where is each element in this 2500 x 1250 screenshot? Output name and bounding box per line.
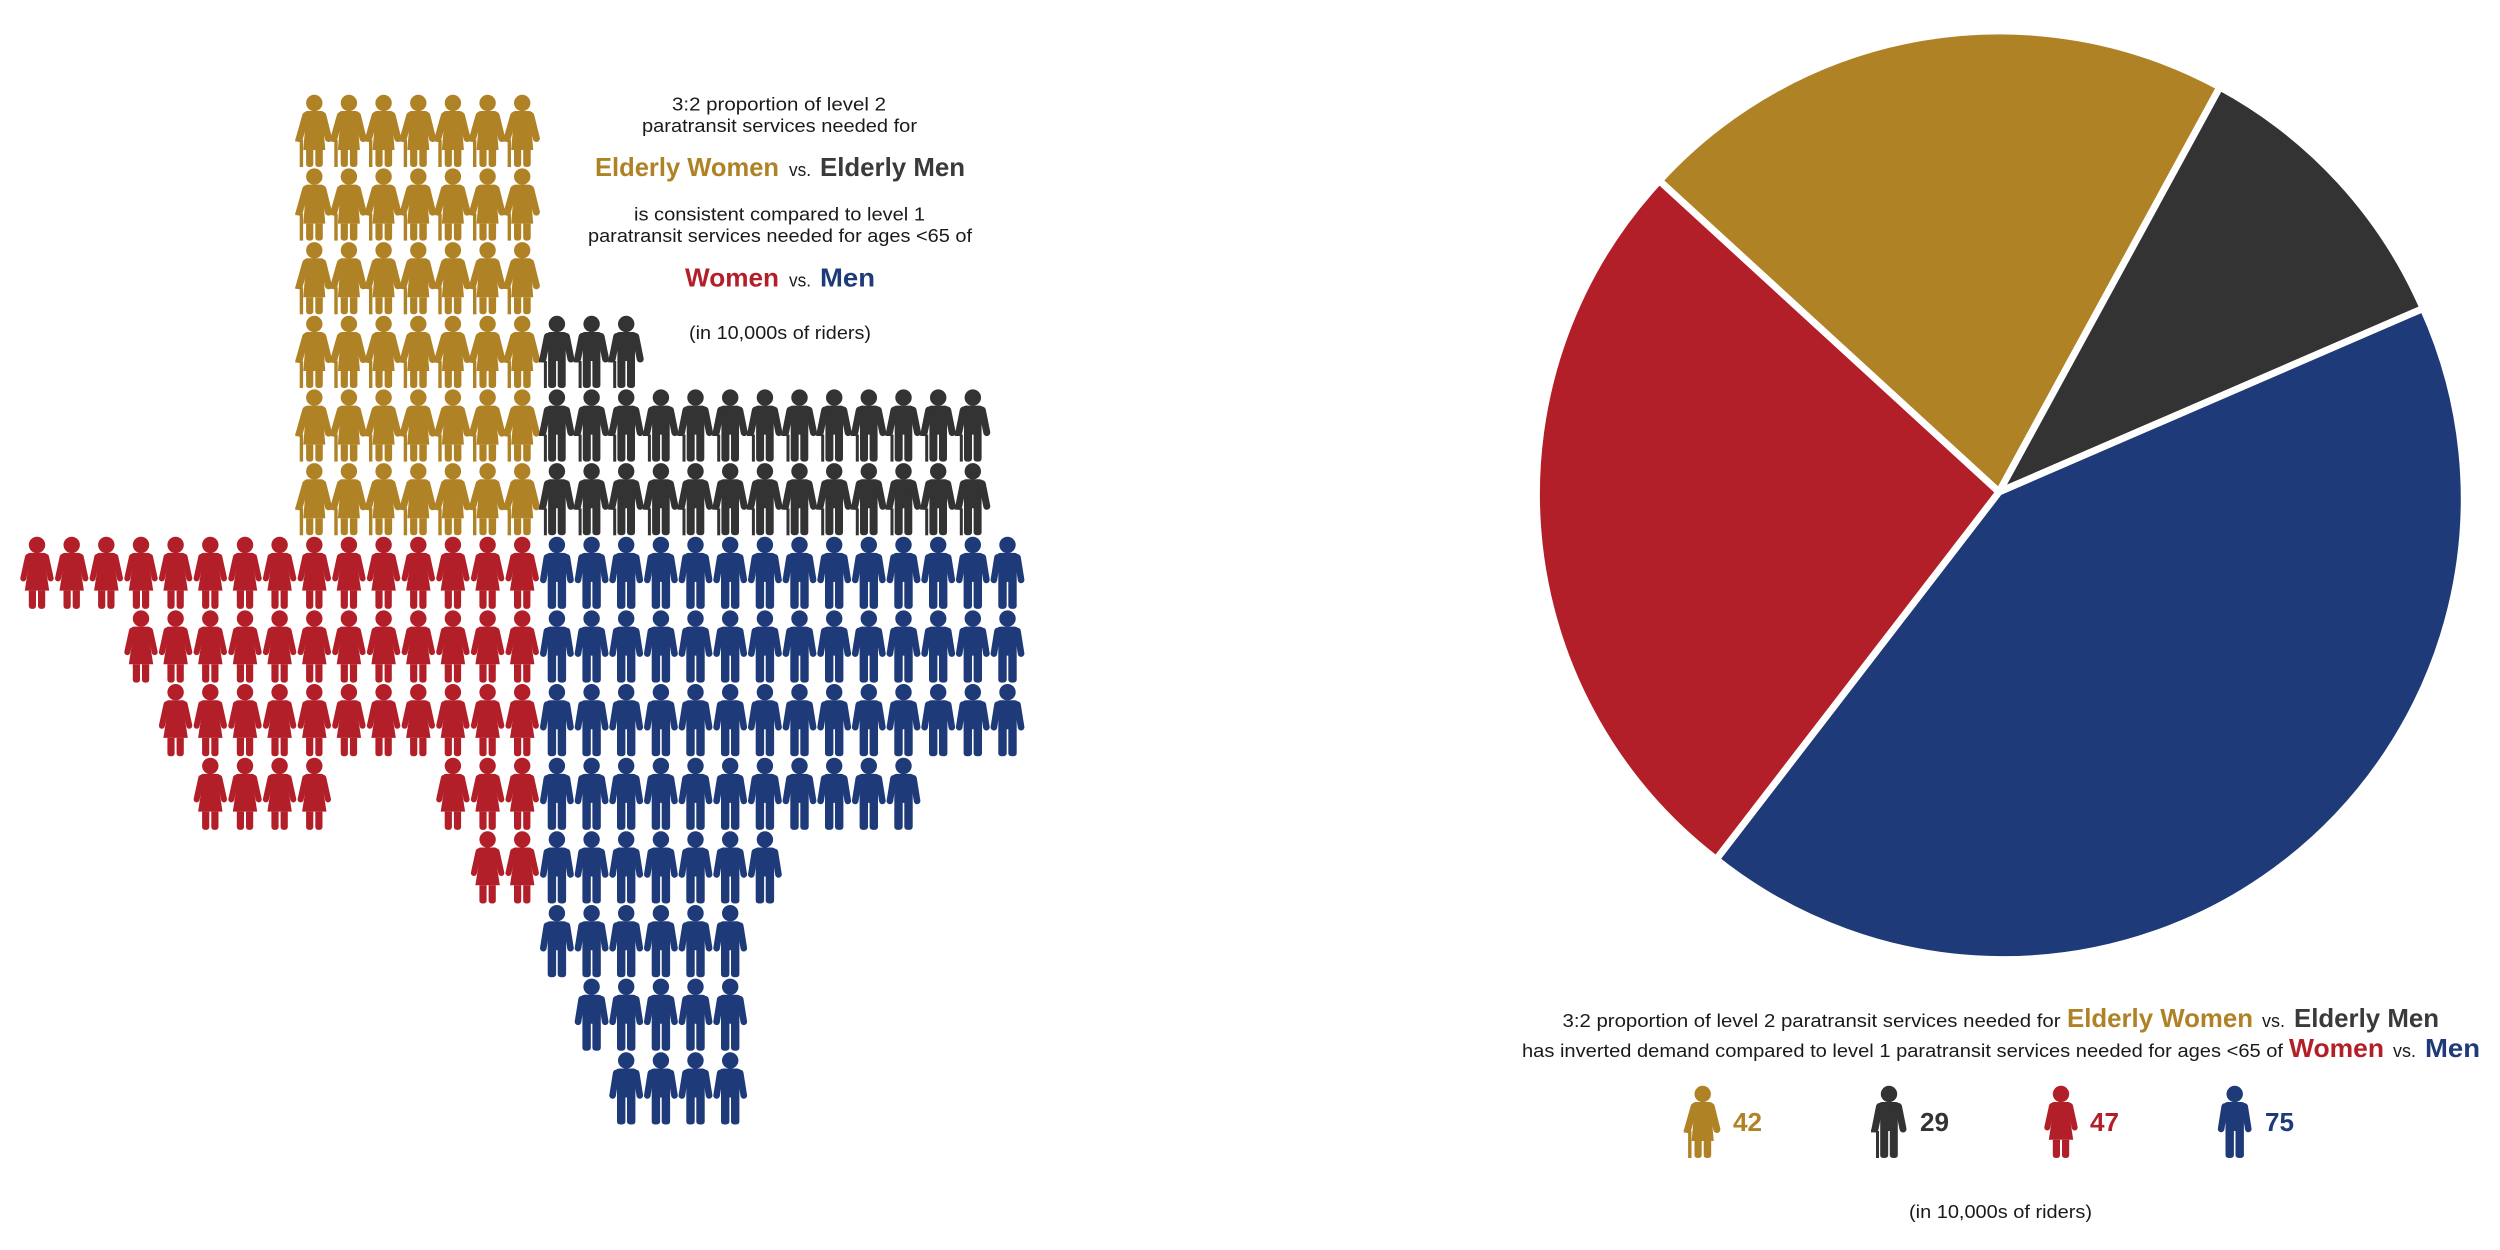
text block: pictogram description [588, 94, 973, 343]
heading: elderly women vs elderly men [595, 152, 965, 182]
pictogram: women under 65 (47) [23, 537, 536, 904]
text: proportion intro [642, 94, 917, 136]
text: line one [1562, 1003, 2439, 1033]
legend item: women 47: 47 [2090, 1107, 2119, 1137]
legend item: men 75 [2221, 1086, 2294, 1158]
text: proportion intro: 3:2 proportion of level 2 [672, 94, 886, 115]
text: line two: Women [2289, 1033, 2384, 1063]
pictogram: elderly men (29) [539, 316, 987, 535]
text: line one: 3:2 proportion of level 2 paratransit services needed for [1562, 1010, 2060, 1031]
legend item: elderly men 29 [1871, 1086, 1949, 1158]
text: proportion intro: paratransit services needed for [642, 115, 917, 136]
text: line two: has inverted demand compared to level 1 paratransit services needed for ages <65 of [1522, 1040, 2284, 1061]
heading: elderly women vs elderly men: Elderly Men [820, 152, 965, 182]
text: legend units note: (in 10,000s of riders) [1909, 1201, 2092, 1222]
legend item: elderly women 42 [1684, 1086, 1762, 1158]
heading: elderly women vs elderly men: Elderly Women [595, 152, 779, 182]
text: line one: vs. [2262, 1010, 2285, 1031]
text: line two: vs. [2393, 1040, 2416, 1061]
legend [1684, 1086, 2294, 1158]
heading: women vs men: vs. [789, 270, 811, 291]
heading: women vs men: Women [685, 263, 779, 293]
pictogram: men under 65 (75) [543, 537, 1021, 1124]
heading: elderly women vs elderly men: vs. [789, 159, 811, 180]
pie chart [1536, 31, 2464, 960]
text: comparison [588, 204, 973, 246]
heading: women vs men [685, 263, 875, 293]
slice: women under 65 [1536, 181, 1999, 859]
text: units note: (in 10,000s of riders) [689, 322, 871, 343]
slice: elderly men [1999, 87, 2423, 492]
text block: pie description [1522, 1003, 2480, 1063]
text: comparison: is consistent compared to level 1 [634, 204, 925, 225]
legend item: women 47 [2047, 1086, 2119, 1158]
legend item: elderly men 29: 29 [1920, 1107, 1949, 1137]
text: line two [1522, 1033, 2480, 1063]
pictogram: elderly women (42) [295, 95, 536, 535]
legend item: elderly women 42: 42 [1733, 1107, 1762, 1137]
legend item: men 75: 75 [2265, 1107, 2294, 1137]
text: line one: Elderly Women [2067, 1003, 2253, 1033]
text: comparison: paratransit services needed for ages <65 of [588, 225, 973, 246]
slice: elderly women [1659, 31, 2220, 492]
text: line one: Elderly Men [2294, 1003, 2439, 1033]
text: line two: Men [2425, 1033, 2480, 1063]
slice: men under 65 [1716, 308, 2464, 960]
panel: pictogram of riders [23, 95, 1021, 1124]
heading: women vs men: Men [820, 263, 875, 293]
